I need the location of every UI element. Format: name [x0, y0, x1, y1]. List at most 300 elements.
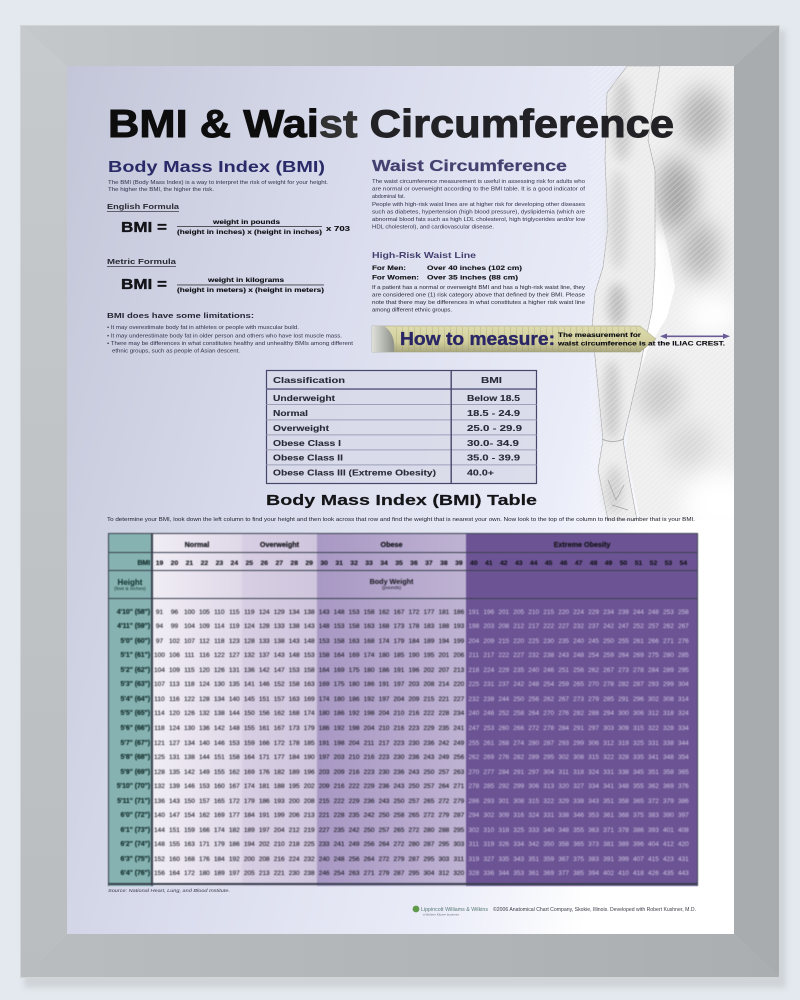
weight rows: 328: [618, 754, 629, 761]
weight rows: 264: [364, 856, 374, 863]
weight rows: 176: [199, 856, 210, 863]
weight rows: 264: [438, 783, 449, 790]
weight rows: 166: [199, 827, 210, 834]
weight rows: 185: [394, 652, 404, 659]
weight rows: 296: [633, 696, 644, 703]
weight rows: 197: [259, 827, 270, 834]
weight rows: 192: [334, 725, 345, 732]
weight rows: 143: [274, 652, 285, 659]
weight rows: 262: [468, 754, 479, 761]
weight rows: 302: [483, 812, 494, 819]
weight rows: 107: [154, 681, 165, 688]
weight rows: 229: [364, 783, 374, 790]
weight rows: 248: [528, 681, 539, 688]
panel: waist circumference: [372, 158, 586, 314]
weight rows: 146: [184, 783, 195, 790]
weight rows: 116: [169, 696, 180, 703]
weight rows: 114: [214, 623, 225, 630]
limitations: • There may be differences in what constitutes healthy and unhealthy BMIs among different: [107, 341, 354, 347]
weight rows: 287: [453, 812, 464, 819]
BMI number row: 31: [335, 560, 343, 566]
english formula: x 703: [326, 226, 350, 233]
weight rows: 180: [379, 652, 389, 659]
weight rows: 191: [379, 681, 389, 688]
BMI number row: 35: [395, 560, 403, 566]
weight rows: 214: [438, 681, 449, 688]
weight rows: 222: [498, 652, 509, 659]
weight rows: 186: [364, 681, 374, 688]
weight rows: 181: [259, 783, 270, 790]
weight rows: 355: [573, 827, 584, 834]
weight rows: 171: [199, 841, 210, 848]
weight rows: 267: [558, 696, 569, 703]
weight rows: 334: [513, 841, 524, 848]
weight rows: 182: [229, 827, 240, 834]
weight rows: 216: [334, 783, 345, 790]
weight rows: 4'10" (58"): [117, 609, 150, 616]
weight rows: 301: [498, 798, 509, 805]
classification table: Overweight: [273, 424, 330, 433]
BMI number row: 29: [305, 560, 313, 566]
weight rows: 287: [394, 870, 404, 877]
weight rows: 136: [154, 798, 165, 805]
BMI number row: 38: [440, 560, 448, 566]
weight rows: 189: [289, 769, 300, 776]
weight rows: 256: [364, 841, 374, 848]
weight rows: 172: [409, 609, 419, 616]
weight rows: 169: [319, 681, 330, 688]
weight rows: 209: [409, 696, 419, 703]
weight rows: 262: [663, 623, 674, 630]
weight rows: 202: [304, 783, 315, 790]
weight rows: 5'11" (71"): [117, 798, 150, 805]
weight rows: 338: [663, 740, 674, 747]
weight rows: 184: [244, 812, 255, 819]
weight rows: 157: [274, 696, 285, 703]
classification table: Obese Class II: [273, 454, 343, 462]
weight rows: 270: [543, 710, 554, 717]
weight rows: 173: [394, 623, 404, 630]
weight rows: 426: [648, 870, 659, 877]
weight rows: 6'4" (76"): [121, 870, 150, 877]
weight rows: 242: [364, 812, 374, 819]
weight rows: 181: [438, 609, 449, 616]
weight rows: 210: [379, 725, 389, 732]
weight rows: 124: [199, 681, 210, 688]
weight rows: 218: [468, 667, 479, 674]
weight rows: 295: [409, 870, 419, 877]
weight rows: 153: [319, 638, 330, 645]
BMI number row: 52: [650, 560, 657, 566]
weight rows: 282: [618, 681, 629, 688]
weight rows: 186: [319, 725, 330, 732]
weight rows: 180: [364, 667, 374, 674]
weight rows: 97: [156, 638, 163, 645]
weight rows: 272: [528, 725, 539, 732]
weight rows: 331: [603, 769, 614, 776]
weight rows: 249: [349, 841, 360, 848]
weight rows: 272: [379, 856, 389, 863]
weight rows: 197: [379, 696, 389, 703]
weight rows: 204: [468, 638, 479, 645]
weight rows: 223: [409, 725, 419, 732]
weight rows: 124: [169, 725, 180, 732]
weight rows: 291: [573, 725, 584, 732]
weight rows: 130: [214, 681, 225, 688]
weight rows: 261: [633, 638, 644, 645]
weight rows: 276: [498, 754, 509, 761]
weight rows: 168: [184, 856, 195, 863]
weight rows: 236: [409, 754, 419, 761]
weight rows: 378: [618, 827, 629, 834]
limitations: BMI does have some limitations:: [107, 313, 254, 320]
weight rows: 163: [364, 623, 374, 630]
weight rows: 257: [648, 623, 659, 630]
weight rows: 258: [513, 710, 524, 717]
weight rows: 164: [244, 754, 255, 761]
metric formula: [107, 257, 324, 294]
weight rows: 241: [453, 725, 464, 732]
weight rows: 329: [558, 798, 569, 805]
weight rows: 331: [543, 812, 554, 819]
weight rows: 242: [603, 623, 614, 630]
weight rows: 6'1" (73"): [121, 827, 150, 834]
weight rows: 344: [498, 870, 509, 877]
weight rows: 5'4" (64"): [121, 696, 150, 703]
weight rows: 265: [573, 681, 584, 688]
weight rows: 271: [453, 783, 464, 790]
weight rows: 146: [214, 740, 225, 747]
weight rows: 142: [259, 667, 270, 674]
classification table: [266, 370, 537, 484]
weight rows: 196: [409, 667, 419, 674]
weight rows: 260: [498, 725, 509, 732]
wrist crease: [602, 439, 628, 510]
weight rows: 162: [199, 812, 210, 819]
weight rows: 272: [394, 841, 404, 848]
limitations: ethnic groups, such as people of Asian descent.: [112, 348, 240, 354]
weight rows: 270: [468, 769, 479, 776]
high-risk waist line: Over 35 inches (88 cm): [427, 274, 518, 282]
intro text: [108, 180, 328, 193]
weight rows: 96: [171, 609, 178, 616]
weight rows: 279: [379, 870, 389, 877]
weight rows: 310: [483, 827, 494, 834]
weight rows: 284: [498, 769, 509, 776]
weight rows: 138: [214, 710, 225, 717]
weight rows: 186: [334, 710, 345, 717]
weight rows: 229: [423, 725, 434, 732]
weight rows: 293: [648, 681, 659, 688]
weight rows: 220: [513, 638, 524, 645]
weight rows: 120: [169, 710, 180, 717]
weight rows: 372: [648, 798, 659, 805]
weight rows: 259: [603, 652, 614, 659]
BMI number row: BMI: [137, 560, 150, 566]
weight rows: 308: [663, 696, 674, 703]
weight rows: 153: [304, 652, 315, 659]
weight rows: 186: [453, 609, 464, 616]
high-risk waist line: For Women:: [372, 274, 419, 282]
weight rows: 304: [423, 870, 434, 877]
weight rows: 311: [454, 856, 464, 863]
weight rows: 272: [438, 798, 449, 805]
height column heading: Height: [118, 578, 142, 586]
weight rows: 381: [603, 841, 614, 848]
weight rows: 124: [244, 623, 255, 630]
weight rows: 179: [244, 798, 255, 805]
weight rows: 198: [349, 725, 360, 732]
weight rows: 282: [573, 710, 584, 717]
weight rows: 267: [603, 667, 614, 674]
BMI number row: 49: [605, 560, 612, 566]
weight rows: 299: [513, 783, 524, 790]
weight rows: 284: [558, 725, 569, 732]
weight rows: 175: [334, 681, 345, 688]
description: HDL cholesterol), and cardiovascular disease.: [372, 224, 494, 230]
weight rows: 5'6" (66"): [121, 725, 150, 732]
BMI number row: 25: [246, 560, 253, 566]
weight rows: 233: [319, 841, 330, 848]
poster background: [67, 66, 734, 934]
weight rows: 241: [334, 841, 345, 848]
high-risk waist line: If a patient has a normal or overweight BMI and has a high-risk waist line, they: [372, 285, 585, 291]
weight rows: 119: [244, 609, 254, 616]
weight rows: 306: [528, 783, 539, 790]
weight rows: 322: [603, 754, 614, 761]
weight rows: 184: [289, 754, 300, 761]
high-risk waist line: are considered one (1) risk category above that defined by their BMI. Please: [372, 292, 585, 298]
weight rows: 285: [678, 652, 689, 659]
weight rows: 407: [633, 856, 644, 863]
publisher logo: [413, 906, 488, 916]
weight rows: 250: [423, 769, 434, 776]
weight rows: 100: [154, 652, 165, 659]
weight rows: 280: [409, 841, 419, 848]
weight rows: 183: [423, 623, 434, 630]
weight rows: 177: [274, 754, 285, 761]
weight rows: 202: [423, 667, 434, 674]
weight rows: 148: [229, 725, 240, 732]
poster text: [107, 103, 730, 916]
weight rows: 313: [543, 783, 554, 790]
weight rows: 136: [199, 725, 210, 732]
weight rows: 110: [214, 609, 225, 616]
BMI number row: 30: [320, 560, 328, 566]
BMI number row: 28: [290, 560, 298, 566]
weight rows: 145: [244, 696, 255, 703]
weight rows: 256: [573, 667, 584, 674]
BMI number row: 24: [231, 560, 238, 566]
weight rows: 236: [364, 798, 374, 805]
weight rows: 201: [438, 652, 449, 659]
weight rows: 328: [663, 725, 674, 732]
BMI number row: 47: [575, 560, 582, 566]
weight rows: 272: [423, 812, 434, 819]
weight rows: 151: [214, 754, 225, 761]
weight rows: 265: [423, 798, 434, 805]
weight rows: 155: [169, 841, 180, 848]
weight rows: 152: [274, 681, 285, 688]
weight rows: 348: [558, 827, 569, 834]
weight rows: 355: [633, 783, 644, 790]
weight rows: 131: [229, 667, 240, 674]
weight rows: 289: [663, 667, 674, 674]
weight rows: 279: [394, 856, 404, 863]
weight rows: 174: [244, 783, 255, 790]
weight rows: 320: [453, 870, 464, 877]
weight rows: 322: [543, 798, 554, 805]
weight rows: 128: [199, 696, 210, 703]
weight rows: 5'10" (70"): [117, 783, 150, 790]
category headers: Obese: [380, 540, 402, 549]
weight rows: 122: [214, 652, 225, 659]
english formula: [107, 202, 350, 236]
weight rows: 189: [214, 870, 225, 877]
weight rows: 107: [184, 638, 195, 645]
weight rows: 194: [244, 841, 255, 848]
weight rows: 143: [169, 798, 180, 805]
arm: [592, 66, 660, 520]
weight rows: 169: [244, 769, 255, 776]
weight rows: 213: [453, 667, 464, 674]
weight rows: 172: [229, 798, 240, 805]
description: abnormal blood fats such as high LDL cholesterol, high triglycerides and/or low: [372, 217, 585, 223]
weight rows: 224: [483, 667, 494, 674]
weight rows: 303: [453, 841, 464, 848]
weight rows: 220: [558, 609, 569, 616]
weight rows: 138: [274, 638, 285, 645]
weight rows: 235: [513, 667, 524, 674]
weight rows: 263: [349, 870, 360, 877]
weight rows: 274: [513, 740, 524, 747]
high-risk waist line: note that there may be differences in what constitutes a higher risk waist line: [372, 300, 585, 306]
weight rows: 253: [663, 609, 674, 616]
weight rows: 163: [304, 681, 315, 688]
weight rows: 203: [334, 754, 345, 761]
weight rows: 180: [334, 696, 345, 703]
weight rows: 5'2" (62"): [121, 667, 150, 674]
weight rows: 204: [349, 740, 360, 747]
weight rows: 264: [618, 652, 629, 659]
weight rows: 151: [259, 696, 270, 703]
weight rows: 128: [244, 638, 255, 645]
weight rows: 375: [573, 856, 584, 863]
BMI number row: 40: [470, 560, 478, 566]
weight rows: 237: [588, 623, 599, 630]
weight rows: 320: [558, 783, 569, 790]
weight rows: 144: [154, 827, 165, 834]
weight rows: 204: [379, 710, 389, 717]
weight rows: 271: [364, 870, 374, 877]
weight rows: 295: [423, 856, 434, 863]
weight rows: 111: [184, 652, 194, 659]
BMI number row: 42: [500, 560, 508, 566]
panel: body mass index: [107, 159, 354, 354]
weight rows: 284: [648, 667, 659, 674]
weight rows: 221: [319, 812, 330, 819]
weight rows: 331: [648, 740, 659, 747]
weight rows: 225: [304, 841, 315, 848]
weight rows: 336: [483, 870, 494, 877]
weight rows: 188: [274, 783, 285, 790]
weight rows: 227: [513, 652, 524, 659]
weight rows: 167: [274, 725, 285, 732]
weight rows: 345: [633, 769, 644, 776]
weight rows: 105: [199, 609, 210, 616]
weight rows: 288: [588, 710, 599, 717]
weight rows: 249: [453, 740, 464, 747]
high-risk waist line: Over 40 inches (102 cm): [427, 265, 522, 272]
weight rows: 383: [588, 856, 599, 863]
weight rows: 133: [274, 623, 285, 630]
weight rows: 99: [171, 623, 178, 630]
limitations: • It may overestimate body fat in athletes or people with muscular build.: [107, 325, 299, 331]
weight rows: 318: [498, 827, 509, 834]
weight rows: 229: [349, 798, 360, 805]
weight rows: 342: [528, 841, 539, 848]
classification table: Classification: [273, 375, 345, 385]
weight rows: 122: [184, 696, 195, 703]
weight rows: 264: [528, 710, 539, 717]
weight rows: 302: [558, 754, 569, 761]
weight rows: 197: [394, 681, 404, 688]
BMI number row: 19: [156, 560, 163, 566]
weight rows: 118: [214, 638, 225, 645]
BMI number row: 32: [350, 560, 358, 566]
english formula: (height in inches) x (height in inches): [177, 229, 322, 236]
weight rows: 269: [633, 652, 644, 659]
weight rows: 110: [154, 696, 165, 703]
weight rows: 221: [274, 870, 285, 877]
weight rows: 278: [633, 667, 644, 674]
weight rows: 168: [379, 623, 389, 630]
weight rows: 189: [244, 827, 255, 834]
weight rows: 273: [573, 696, 584, 703]
weight rows: 297: [528, 769, 539, 776]
how to measure tape: How to measure:: [400, 329, 555, 349]
weight rows: 239: [618, 609, 629, 616]
BMI number row: 44: [530, 560, 537, 566]
weight rows: 287: [633, 681, 644, 688]
weight rows: 180: [319, 710, 330, 717]
weight rows: 385: [573, 870, 584, 877]
torso: [626, 66, 734, 520]
weight rows: 160: [169, 856, 180, 863]
how to measure tape: The measurement for: [558, 332, 642, 339]
weight rows: 120: [199, 667, 210, 674]
weight rows: 193: [453, 623, 464, 630]
weight rows: 365: [573, 841, 584, 848]
weight rows: [116, 608, 689, 877]
weight rows: 131: [169, 754, 180, 761]
weight rows: 294: [603, 710, 614, 717]
weight rows: 135: [169, 769, 180, 776]
weight rows: 306: [588, 740, 599, 747]
weight rows: 143: [289, 638, 300, 645]
weight rows: 365: [678, 769, 689, 776]
weight rows: 153: [349, 609, 360, 616]
weight rows: 412: [663, 841, 674, 848]
weight rows: 368: [618, 812, 629, 819]
weight rows: 210: [349, 754, 360, 761]
english formula: BMI =: [121, 220, 167, 236]
weight rows: 212: [289, 827, 300, 834]
weight rows: 254: [543, 681, 554, 688]
weight rows: 279: [588, 696, 599, 703]
weight rows: 324: [528, 812, 539, 819]
weight rows: 295: [438, 841, 449, 848]
